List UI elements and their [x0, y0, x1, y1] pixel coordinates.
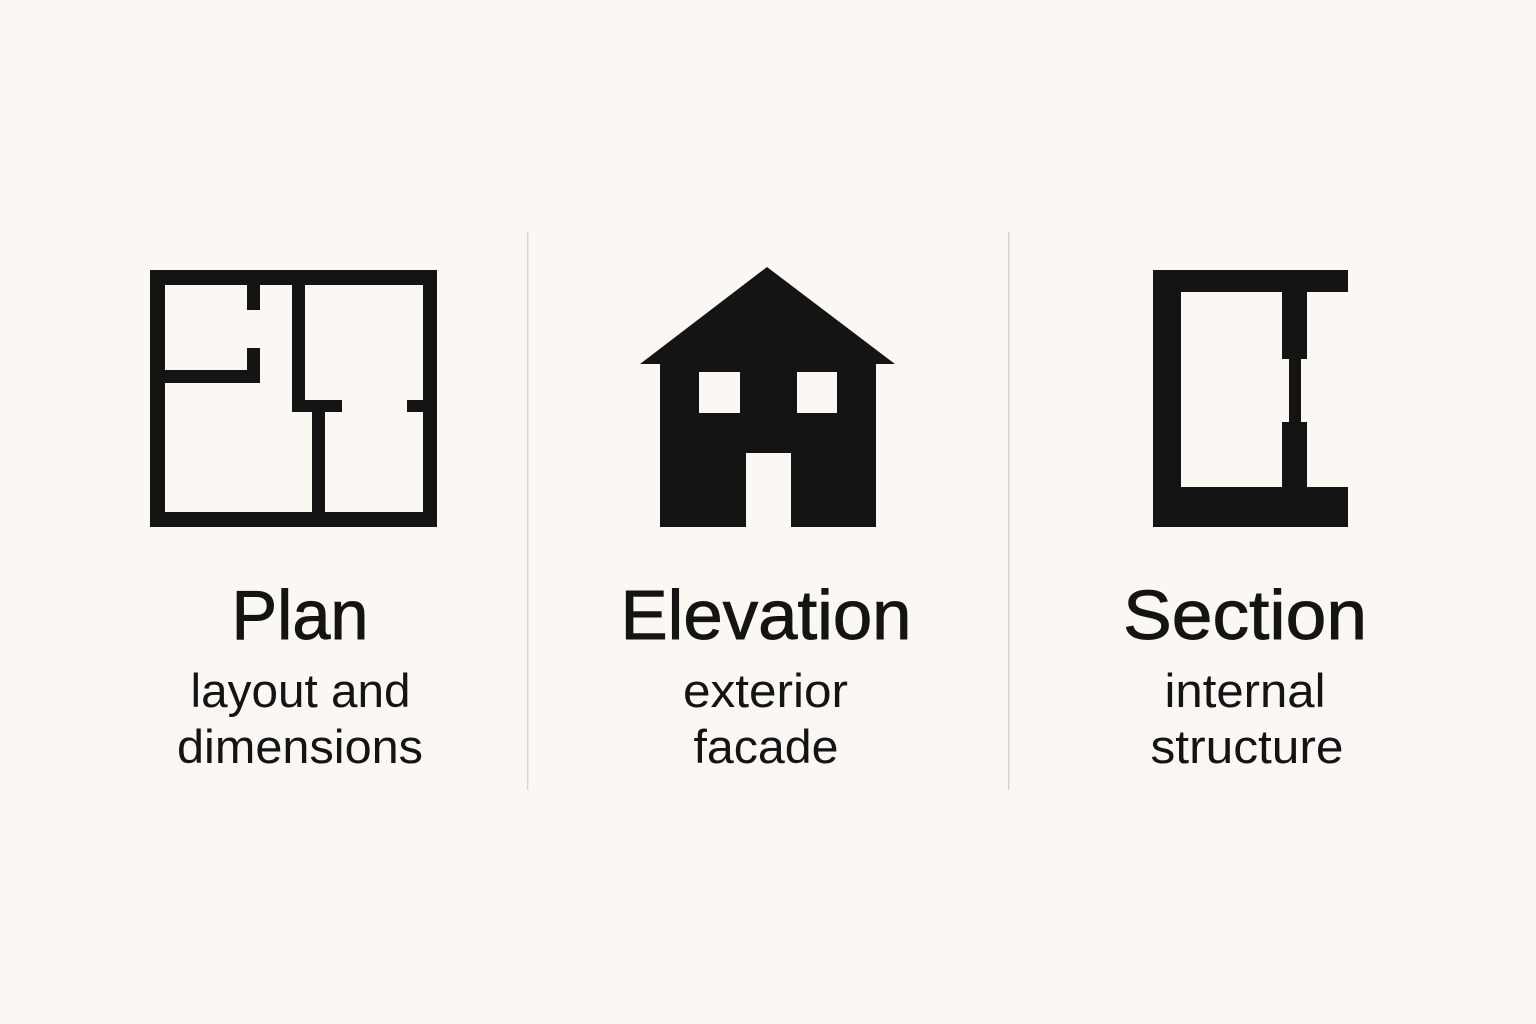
icon: house: [640, 267, 895, 527]
heading: Elevation: Elevation: [620, 576, 912, 654]
panel: section: [1123, 270, 1367, 773]
description: exterior facade: facade: [694, 720, 838, 773]
icon: building section: [1153, 270, 1348, 527]
panel: elevation: [620, 267, 912, 773]
description: internal structure: structure: [1150, 720, 1344, 773]
description: exterior facade: [683, 664, 848, 773]
panel: plan: [150, 270, 437, 773]
icon: floor plan: [150, 270, 437, 527]
description: layout and dimensions: [177, 664, 423, 773]
heading: Section: Section: [1123, 576, 1367, 654]
description: layout and dimensions: layout and: [190, 664, 410, 717]
description: exterior facade: exterior: [683, 664, 848, 717]
description: layout and dimensions: dimensions: [177, 720, 423, 773]
description: internal structure: [1150, 664, 1344, 773]
heading: Plan: Plan: [232, 576, 368, 654]
description: internal structure: internal: [1164, 664, 1326, 717]
